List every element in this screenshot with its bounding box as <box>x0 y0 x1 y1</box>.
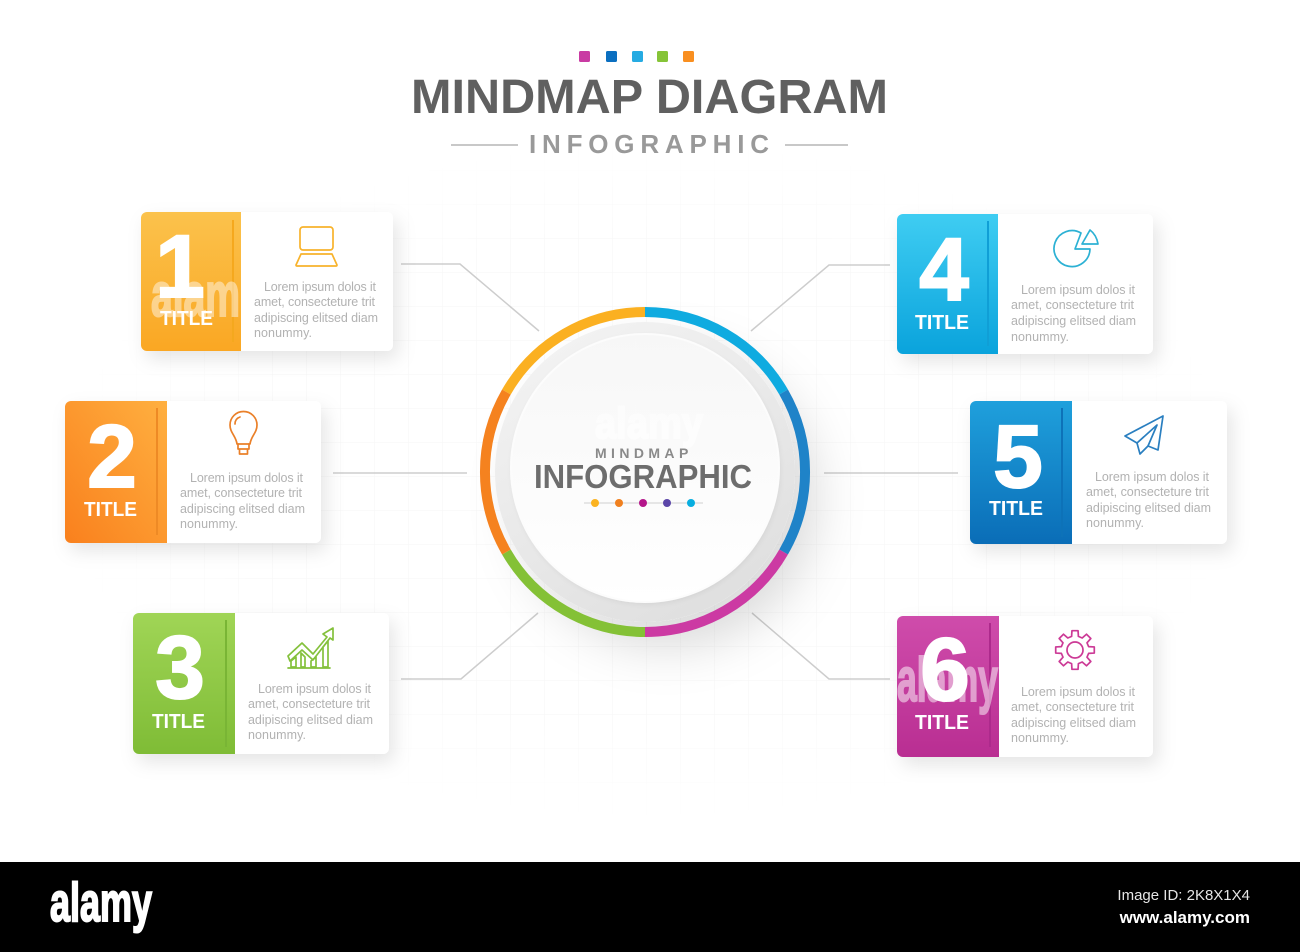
text block: nonummy. <box>1086 516 1144 530</box>
icon: light bulb <box>230 412 257 454</box>
panel: card 6: TITLE <box>915 712 969 734</box>
central circle <box>485 312 805 632</box>
panel: card 3: 3 <box>155 617 205 717</box>
outer disc <box>495 322 795 622</box>
panel: card 6: alamy <box>897 646 998 715</box>
text block: nonummy. <box>180 517 238 531</box>
text block: adipiscing elitsed diam <box>1011 716 1136 730</box>
image id: Image ID: 2K8X1X4 <box>1117 887 1250 904</box>
center label: INFOGRAPHIC <box>534 458 752 495</box>
panel: card 1: alam <box>151 261 240 330</box>
panel: card 3: TITLE <box>152 711 205 733</box>
panel: card 1: 1 <box>155 216 205 316</box>
text block: amet, consecteture trit <box>1011 298 1135 312</box>
panel: card 5 <box>970 401 1227 544</box>
text block: nonummy. <box>248 728 306 742</box>
website: www.alamy.com <box>1119 908 1250 927</box>
icon: paper plane <box>1125 416 1163 454</box>
text block: Lorem ipsum dolos it <box>258 682 372 696</box>
footer logo: alamy <box>50 871 152 933</box>
panel: card 2: 2 <box>87 406 137 506</box>
panel: card 1 <box>141 212 393 351</box>
text block: nonummy. <box>254 326 312 340</box>
subheading: INFOGRAPHIC <box>529 129 775 159</box>
icon: pie chart <box>1054 230 1098 267</box>
inner disc <box>511 334 779 602</box>
segmented ring <box>485 312 805 632</box>
connector lines <box>333 264 958 679</box>
text block: amet, consecteture trit <box>1011 700 1135 714</box>
text block <box>1086 470 1211 530</box>
panel: card 2: TITLE <box>84 499 137 521</box>
text block: Lorem ipsum dolos it <box>1095 470 1210 484</box>
panel: card 5: 5 <box>993 406 1043 506</box>
text block <box>180 471 305 531</box>
center label <box>534 445 752 507</box>
text block: adipiscing elitsed diam <box>1011 314 1136 328</box>
footer bar <box>0 862 1300 952</box>
text block: adipiscing elitsed diam <box>248 713 373 727</box>
panel: card 6: 6 <box>920 619 970 719</box>
panel: card 2 <box>65 401 321 543</box>
text block: Lorem ipsum dolos it <box>1021 685 1136 699</box>
icon: laptop <box>296 227 337 266</box>
text block: Lorem ipsum dolos it <box>190 471 304 485</box>
text block: amet, consecteture trit <box>254 295 376 309</box>
panel: card 3 <box>133 613 389 754</box>
colour squares <box>579 51 694 62</box>
panel: card 4: 4 <box>919 219 969 319</box>
text block: Lorem ipsum dolos it <box>264 280 377 294</box>
panel: card 4: TITLE <box>915 312 969 334</box>
text block <box>1011 685 1136 745</box>
center label: MINDMAP <box>595 445 693 461</box>
text block: adipiscing elitsed diam <box>254 311 378 325</box>
text block: amet, consecteture trit <box>248 697 371 711</box>
text block: nonummy. <box>1011 330 1069 344</box>
text block: Lorem ipsum dolos it <box>1021 283 1136 297</box>
text block <box>248 682 373 742</box>
panel: card 5: TITLE <box>989 498 1043 520</box>
title block <box>411 51 888 159</box>
panel: card 1: TITLE <box>160 308 213 330</box>
text block: amet, consecteture trit <box>1086 485 1210 499</box>
text block: adipiscing elitsed diam <box>180 502 305 516</box>
panel: card 4 <box>897 214 1153 354</box>
icon: gear <box>1056 631 1094 669</box>
text block <box>1011 283 1136 344</box>
watermark: alamy <box>595 399 703 448</box>
text block: amet, consecteture trit <box>180 486 303 500</box>
panel: card 6 <box>897 616 1153 757</box>
text block <box>254 280 378 340</box>
text block: adipiscing elitsed diam <box>1086 501 1211 515</box>
text block: nonummy. <box>1011 731 1069 745</box>
heading: MINDMAP DIAGRAM <box>411 71 888 124</box>
icon: growth chart <box>288 628 333 668</box>
